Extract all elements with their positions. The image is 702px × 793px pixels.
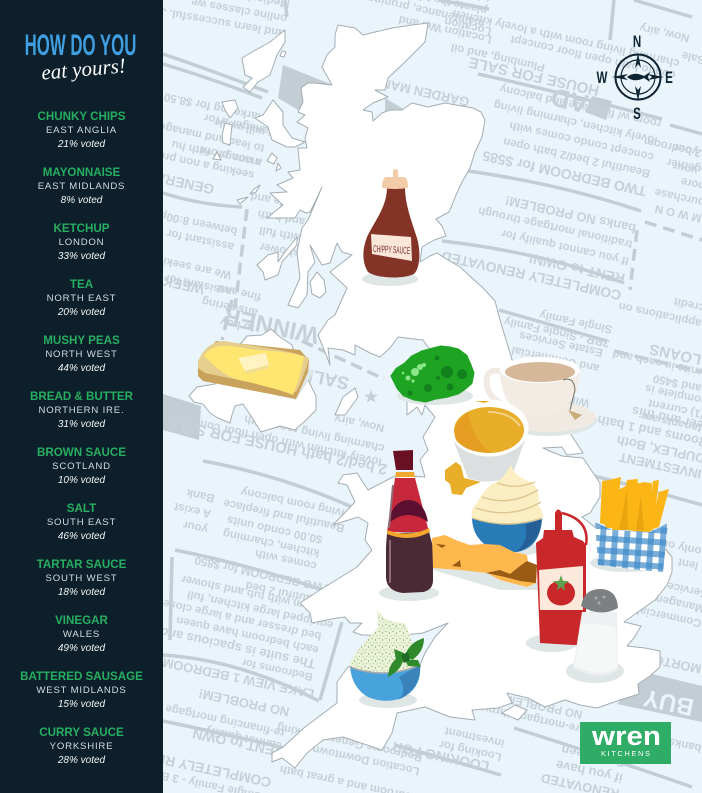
item: mushy peas: 44% voted [58,363,105,374]
newspaper background: with full [258,224,304,243]
item: bread and butter: 31% voted [58,419,105,430]
item: curry sauce: YORKSHIRE [50,741,113,752]
newspaper background: ★ [364,389,379,406]
compass: W [597,69,608,88]
newspaper background: condo bath open floor concept [509,33,677,81]
newspaper background: assistant for the [146,222,235,252]
item: brown sauce: SCOTLAND [52,461,111,472]
newspaper background: banks for [649,731,702,754]
item: ketchup [53,222,110,262]
cup of tea [487,357,597,436]
newspaper background: to buy [219,315,256,334]
newspaper background: shower [258,240,301,259]
newspaper background: Bank [185,486,216,504]
compass: N [633,33,641,52]
newspaper background: and bath [257,207,306,227]
newspaper background: Location [443,15,493,37]
newspaper background: LOOKING FOR [391,739,491,775]
item: salt: 46% voted [58,531,105,542]
item: mushy peas: MUSHY PEAS [43,334,120,347]
item: salt [47,502,116,542]
mushy peas [392,347,473,405]
salt shaker [566,589,624,683]
newspaper background: Location Downtown [311,742,421,777]
newspaper background: 2 bed/2 bath HOUSE FOR SALE [165,414,389,478]
newspaper background: A exist [173,500,212,519]
newspaper background: bed dresser and a large closet [158,596,323,642]
newspaper background: will work [215,116,267,138]
newspaper background: re-mortgage through [467,698,581,734]
curry sauce pot [445,400,528,495]
newspaper background: Looking for [438,738,503,762]
newspaper background: NO PROBLEM! [197,686,291,720]
newspaper background: COMPLETELY RENOVATED [89,737,273,791]
newspaper background: COMPLETELY RENOVATED [440,248,623,304]
item: tea: TEA [70,278,93,291]
newspaper background: concept condo comes with [508,119,655,163]
newspaper background: The suite is spacious and [159,624,317,672]
battered sausage and fish [432,535,540,590]
logo: wren kitchens: KITCHENS [601,749,650,758]
item: chunky chips: 21% voted [58,139,105,150]
newspaper background: investment [444,724,506,749]
newspaper background: seeking a non profit [146,146,256,181]
item: tartar sauce: TARTAR SAUCE [37,558,126,571]
item: vinegar: WALES [63,629,100,640]
newspaper background: Beautiful and fireplace [222,496,346,534]
newspaper background: GENERAL [145,168,216,198]
item: mushy peas [43,334,120,374]
item: tartar sauce: SOUTH WEST [46,573,117,584]
chippy sauce bottle: CHIPPY SAUCE [373,244,411,257]
Uist [222,100,238,145]
title: eat yours! [40,53,127,85]
newspaper background: RENT to OWN! [527,250,626,287]
item: tartar sauce: 18% voted [58,587,105,598]
newspaper background: $0.00 condo units [226,513,324,545]
chunky chips [590,477,669,572]
item: chunky chips [37,110,126,150]
small islands [213,51,286,204]
newspaper background: Manager a for [202,111,279,138]
newspaper background: RENT to OWN [191,726,286,761]
item: bread and butter [30,390,133,430]
newspaper background: tenants are [640,409,702,434]
newspaper background: Now, airy [333,411,386,434]
item: mayonnaise [38,166,125,206]
newspaper background: your [671,159,699,176]
newspaper background: lent [677,555,700,571]
newspaper background: charming living room with [243,412,386,454]
item: battered sausage: WEST MIDLANDS [36,685,127,696]
newspaper background: room w/ fireplace and balcony [498,82,662,129]
item: battered sausage: BATTERED SAUSAGE [20,670,143,683]
item: chunky chips: CHUNKY CHIPS [37,110,126,123]
newspaper background: WINNER [220,302,321,349]
item: curry sauce: CURRY SAUCE [39,726,124,739]
newspaper background: Beautiful 2 bed [245,579,328,607]
item: brown sauce: BROWN SAUCE [37,446,126,459]
newspaper background: Bedrooms for [240,656,314,682]
title: HOW DO YOU [25,29,136,62]
newspaper background: traditional mortgage through [477,204,634,250]
newspaper background: Bedrooms General Parking [276,721,424,763]
item: bread and butter: BREAD & BUTTER [30,390,133,403]
newspaper background: AD [548,82,591,119]
newspaper background: between 8:00pm $12.75 [110,198,239,237]
compass: E [665,69,673,88]
item: curry sauce: 28% voted [58,755,105,766]
newspaper background: your [182,518,209,535]
newspaper background: Beautiful 2 bed/2 bath open [502,135,651,179]
newspaper background: Location Wel and [398,13,493,45]
item: mayonnaise: EAST MIDLANDS [38,181,125,192]
newspaper background: banks NO PROBLEM! [504,193,637,236]
item: salt: SALT [67,502,96,515]
item: vinegar: 49% voted [58,643,105,654]
ketchup bottle [526,510,586,652]
newspaper background: M W O N [654,202,702,224]
newspaper background: TWO BEDROOM for $850 [194,554,331,594]
item: mayonnaise: 8% voted [61,195,102,206]
vinegar bottle [379,450,439,601]
logo: wren kitchens [580,721,671,764]
item: vinegar [55,614,108,654]
newspaper background: and learn successful. Just [142,2,286,39]
item: battered sausage: 15% voted [58,699,105,710]
newspaper background: each bedroom have queen [175,614,320,655]
newspaper background: SALE [300,364,351,394]
compass [597,33,673,124]
newspaper background: and Commercial P.O. [486,338,601,374]
Lewis and Harris [242,30,285,92]
newspaper background: assistant for [163,271,233,297]
item: tea: NORTH EAST [47,293,116,304]
newspaper background: charming living room with a lovely kitchen [452,7,681,69]
newspaper background: applications on [618,300,702,329]
newspaper background: re-financing mortgage [164,702,286,739]
newspaper background: GARDEN MAN [380,76,471,110]
newspaper background: We are seeking [148,252,233,281]
newspaper background: MORTGAGE [624,646,702,677]
item: chunky chips: EAST ANGLIA [46,125,117,136]
newspaper background: Single Family [538,308,614,335]
logo: wren kitchens: wren [591,721,661,751]
newspaper background: lovely kitchen, charming living [493,98,659,146]
title [25,29,136,85]
newspaper background: a non profit [199,143,263,168]
Skye [255,100,305,147]
item: ketchup: LONDON [59,237,104,248]
newspaper background: LOANS [648,340,702,368]
newspaper background: lovely kitchen with open floor concept [176,412,383,467]
newspaper background: TWO BEDROOM for $585 [481,148,648,200]
mayonnaise bowl [472,464,543,556]
sidebar panel [0,0,163,793]
compass: S [633,105,641,124]
Isle of Man [335,388,358,415]
newspaper background: only on [660,537,702,557]
Isle of Wight [502,705,527,720]
newspaper background: living room balcony [239,485,349,519]
item: ketchup: KETCHUP [53,222,110,235]
item: bread and butter: NORTHERN IRE. [39,405,124,416]
newspaper background: Now, airy [638,21,691,44]
newspaper background: answering [201,295,259,318]
item: tea [47,278,116,318]
item: mushy peas: NORTH WEST [45,349,118,360]
item: brown sauce: 10% voted [58,475,105,486]
newspaper background: Single and [249,190,309,212]
newspaper background: Plumbing, and oil [450,41,546,73]
item: vinegar: VINEGAR [55,614,108,627]
newspaper background: equipped large kitchen, full [186,588,334,631]
newspaper background: marketing for $8.50 [163,90,269,124]
newspaper background: If you cannot qualify for [500,227,630,267]
item: battered sausage [20,670,143,710]
newspaper background: and $450 [652,372,702,394]
newspaper background: 3BR - Single Family [503,315,611,349]
newspaper background: LAKE VIEW 1 BEDROOM [161,655,316,702]
newspaper background: kitchen, charming [222,527,321,559]
item: tea: 20% voted [58,307,105,318]
item: brown sauce [37,446,126,486]
newspaper background: fine and [217,282,262,303]
newspaper background: WEEKEND [132,267,206,298]
newspaper background: manager with hu [171,138,263,168]
bread and butter [198,341,314,400]
item: salt: SOUTH EAST [47,517,116,528]
item: tartar sauce [36,558,126,598]
Northern Ireland [189,329,316,432]
newspaper background: if you have [554,757,624,786]
newspaper background: INVESTMENT [617,450,702,482]
newspaper background: comes with [254,547,318,572]
newspaper background: Estate Services [518,329,604,358]
Great Britain mainland [267,23,672,768]
newspaper background: Will [568,393,591,409]
item: ketchup: 33% voted [58,251,105,262]
newspaper background: cannot qualify [204,723,283,752]
Islay and Jura [257,237,297,280]
item: mayonnaise: MAYONNAISE [43,166,120,179]
newspaper background: HOUSE FOR SALE [467,53,601,99]
chippy sauce bottle [362,169,419,286]
newspaper background: BUY [641,684,696,721]
map of Great Britain and Ireland [189,23,672,768]
newspaper background: to lead and manage [158,120,266,154]
Arran [310,272,326,298]
item: curry sauce [39,726,124,766]
newspaper background: 2 bedroom [643,134,702,159]
newspaper background: Commercial [636,603,702,629]
newspaper background: Cash been [560,742,627,770]
newspaper background: room with tub and shower [180,572,323,614]
tartar sauce bowl [350,610,424,708]
newspaper background: NO PROBLEM! [501,691,584,720]
